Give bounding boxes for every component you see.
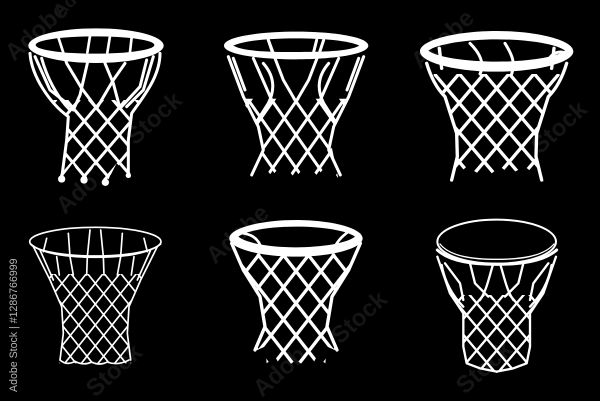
watermarks: Stock bbox=[526, 95, 593, 159]
watermarks: Stock bbox=[81, 338, 148, 401]
stock id caption: Adobe Stock | #1286766999 bbox=[8, 258, 20, 392]
hoop 1: thick rim, beaded net bbox=[28, 28, 164, 186]
hoop 3: elliptical rim with dense net bbox=[420, 31, 574, 182]
watermarks: Stock bbox=[326, 285, 393, 349]
hoop 4: thin wire rim with fine net bbox=[28, 226, 162, 365]
watermarks: Adobe bbox=[406, 4, 480, 74]
hoop 2: wide rim with diamond net bbox=[224, 32, 368, 178]
watermarks: Ado bbox=[51, 168, 104, 219]
watermarks: Stock bbox=[121, 86, 188, 150]
hoop 6: double-line rim with curved net bbox=[436, 218, 558, 373]
watermarks: Adobe bbox=[201, 199, 275, 269]
watermarks: Stock bbox=[451, 335, 518, 399]
hoop 5: thick rim with open diamond net bbox=[229, 220, 363, 364]
watermarks: Adob bbox=[248, 341, 312, 401]
